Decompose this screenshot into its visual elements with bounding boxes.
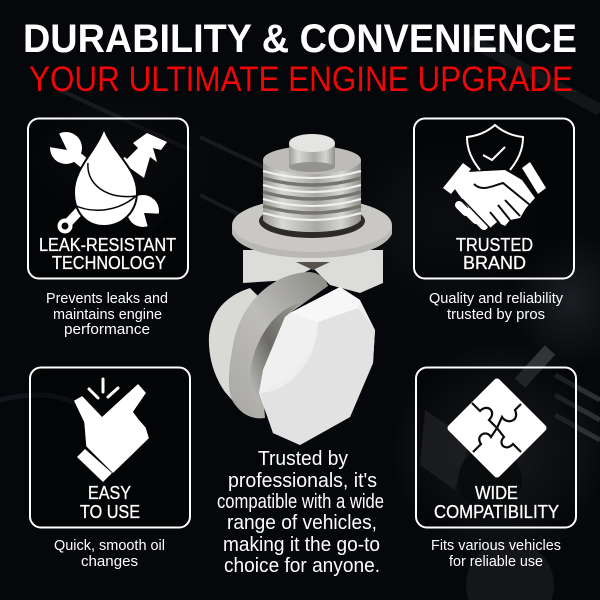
label: WIDE	[475, 482, 518, 503]
description: trusted brand	[429, 291, 564, 323]
description: easy to use: Quick, smooth oil	[54, 538, 165, 554]
description: wide compatibility: for reliable use	[449, 554, 543, 570]
description: easy to use: changes	[81, 554, 138, 570]
center text block: choice for anyone.	[224, 555, 380, 577]
description: trusted brand: Quality and reliability	[429, 291, 564, 307]
description: easy to use	[54, 538, 165, 570]
product: lower drain bolt	[209, 272, 375, 445]
panel: leak-resistant technology	[28, 118, 188, 278]
label	[434, 482, 559, 522]
label: BRAND	[463, 252, 526, 273]
center text block	[217, 448, 384, 577]
center text block: professionals, it's	[228, 470, 377, 492]
center text block: making it the go-to	[223, 534, 380, 556]
label: LEAK-RESISTANT	[39, 234, 176, 255]
description: leak-resistant	[46, 291, 168, 338]
description: wide compatibility	[431, 538, 561, 570]
description: wide compatibility: Fits various vehicles	[431, 538, 561, 554]
icon: puzzle pieces	[451, 382, 543, 474]
label: TECHNOLOGY	[52, 252, 166, 273]
description: leak-resistant: maintains engine	[53, 307, 162, 323]
center text block: compatible with a wide	[217, 491, 384, 513]
panel: easy to use	[30, 368, 190, 528]
panel: trusted brand	[414, 118, 574, 278]
icon: snapping fingers hand	[75, 379, 148, 482]
label: EASY	[88, 482, 131, 503]
label: TRUSTED	[456, 234, 533, 255]
description: leak-resistant: performance	[64, 322, 150, 338]
label	[39, 234, 176, 273]
panel: wide compatibility	[416, 368, 576, 528]
icon: shield and handshake	[443, 125, 546, 228]
description: trusted brand: trusted by pros	[447, 307, 545, 323]
product: upper drain bolt	[232, 134, 392, 293]
label	[456, 234, 533, 273]
label: COMPATIBILITY	[434, 501, 559, 522]
icon: oil drop with wrenches	[43, 127, 167, 235]
title: DURABILITY & CONVENIENCE	[23, 17, 577, 61]
label	[80, 482, 140, 522]
label: TO USE	[80, 501, 140, 522]
description: leak-resistant: Prevents leaks and	[46, 291, 168, 307]
center text block: Trusted by	[258, 448, 348, 470]
center text block: range of vehicles,	[227, 512, 377, 534]
